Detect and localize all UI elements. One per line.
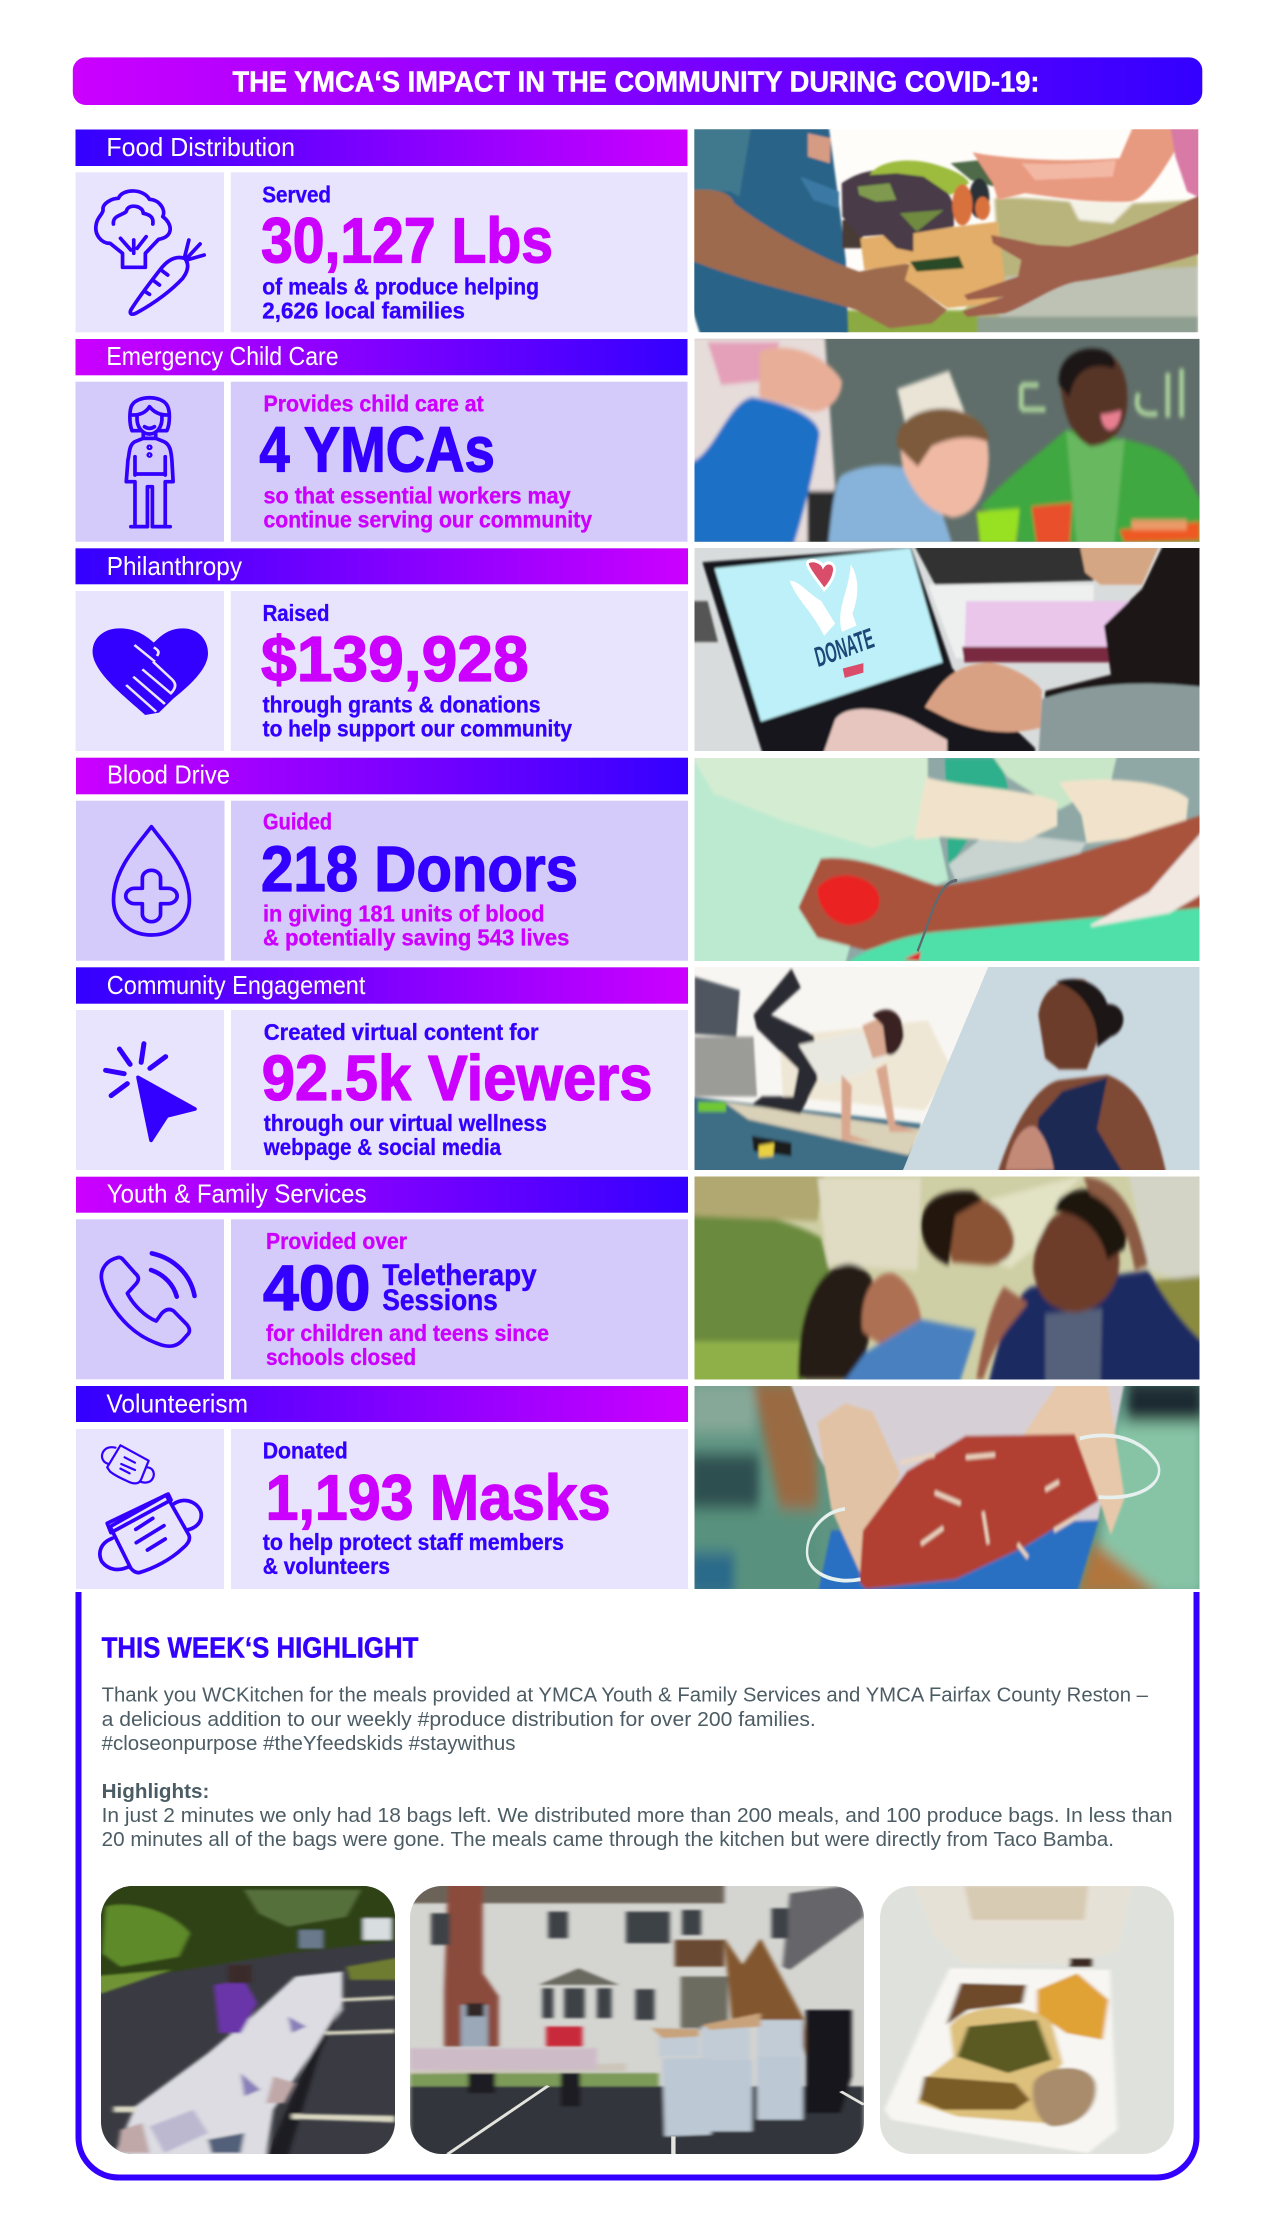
panel: Emergency Child Care xyxy=(76,336,1202,544)
section header: Food Distribution xyxy=(106,132,295,162)
stat text: 4 YMCAs: so that essential workers may xyxy=(264,482,571,508)
highlight body text xyxy=(102,1684,1172,1851)
panel: Blood Drive xyxy=(76,753,1202,965)
stat text: 4 YMCAs xyxy=(231,382,688,542)
stat text: $139,928 xyxy=(231,591,688,751)
panel: this week's highlight xyxy=(78,1592,1196,2178)
panel: Food Distribution xyxy=(76,127,1201,335)
photo: volunteer with bags along parking lot xyxy=(92,1883,404,2156)
section header xyxy=(76,1386,688,1422)
photo: family outdoors xyxy=(694,1176,1200,1380)
stat text: 92.5k Viewers: webpage & social media xyxy=(263,1134,501,1160)
stat text: 4 YMCAs: continue serving our community xyxy=(264,506,592,532)
stat text: 400 Teletherapy Sessions: Provided over xyxy=(266,1228,407,1254)
icon tile: child xyxy=(76,382,224,542)
stat text: 218 Donors: 218 Donors xyxy=(261,833,578,905)
stat text: 218 Donors: Guided xyxy=(263,808,332,834)
panel: Philanthropy xyxy=(76,546,1202,754)
stat text: $139,928: $139,928 xyxy=(261,623,529,695)
title banner xyxy=(73,57,1202,105)
section header: Blood Drive xyxy=(107,759,230,789)
stat text: 400 Teletherapy Sessions: Teletherapy xyxy=(382,1259,537,1292)
highlight body text: a delicious addition to our weekly #produce distribution for over 200 families. xyxy=(102,1708,816,1731)
section header: Volunteerism xyxy=(106,1389,248,1419)
photo: laptop showing donate screen: DONATE xyxy=(812,622,877,673)
stat text: 30,127 Lbs xyxy=(231,172,688,332)
icon tile: cursor click xyxy=(76,1010,224,1170)
rounded frame xyxy=(78,1592,1196,2178)
section header xyxy=(76,758,688,794)
stat text: 218 Donors: in giving 181 units of blood xyxy=(263,901,544,927)
highlight body text: In just 2 minutes we only had 18 bags left. We distributed more than 200 meals, and 100 produce bags. In less than xyxy=(102,1804,1172,1827)
photo: hands holding a red cloth mask xyxy=(694,1386,1200,1589)
stat text: 30,127 Lbs: 2,626 local families xyxy=(262,297,465,323)
photo: blood donation arm with red ball xyxy=(694,758,1200,961)
stat text: 30,127 Lbs: Served xyxy=(262,181,331,207)
icon tile: telephone xyxy=(76,1219,224,1379)
highlight body text: 20 minutes all of the bags were gone. The meals came through the kitchen but were directly from Taco Bamba. xyxy=(102,1828,1114,1851)
photo: tacos in takeout container xyxy=(880,1883,1174,2154)
stat text: 400 Teletherapy Sessions: schools closed xyxy=(266,1344,416,1370)
panel: Youth & Family Services xyxy=(76,1172,1202,1385)
stat text: 400 Teletherapy Sessions: Sessions xyxy=(382,1284,498,1317)
section header xyxy=(76,548,688,584)
icon tile: face masks xyxy=(76,1429,224,1589)
section header xyxy=(76,967,688,1004)
section header xyxy=(76,130,688,166)
panel: Volunteerism xyxy=(76,1382,1202,1595)
photo: hands passing a crate of produce xyxy=(694,129,1198,332)
highlight body text: Thank you WCKitchen for the meals provided at YMCA Youth & Family Services and YMCA Fairfax County Reston – xyxy=(102,1684,1149,1707)
stat text: $139,928: through grants & donations xyxy=(263,692,540,718)
section header: Youth & Family Services xyxy=(107,1178,367,1208)
stat text: 1,193 Masks: & volunteers xyxy=(263,1553,390,1579)
stat text: 1,193 Masks xyxy=(231,1429,688,1589)
icon tile: broccoli and carrot xyxy=(76,172,224,332)
section header xyxy=(76,339,688,375)
stat text: 218 Donors: & potentially saving 543 lives xyxy=(263,925,569,951)
photo: laptop showing donate screen xyxy=(694,548,1200,751)
stat text: 92.5k Viewers xyxy=(231,1010,688,1170)
stat text: 92.5k Viewers: 92.5k Viewers xyxy=(262,1042,652,1114)
stat text: 218 Donors xyxy=(231,801,688,961)
photo: home workout and meditation xyxy=(694,967,1200,1170)
stat text: 400 Teletherapy Sessions xyxy=(231,1219,688,1379)
stat text: 92.5k Viewers: through our virtual wellness xyxy=(264,1110,547,1136)
stat text: 1,193 Masks: 1,193 Masks xyxy=(266,1461,610,1533)
section header: Philanthropy xyxy=(107,551,242,581)
highlight heading: THIS WEEK‘S HIGHLIGHT xyxy=(102,1633,419,1665)
highlight body text: #closeonpurpose #theYfeedskids #staywithus xyxy=(102,1732,515,1755)
photo: children at a table xyxy=(694,338,1200,542)
stat text: 400 Teletherapy Sessions: for children and teens since xyxy=(266,1320,549,1346)
section header: Emergency Child Care xyxy=(106,341,339,371)
title banner: THE YMCA‘S IMPACT IN THE COMMUNITY DURING COVID-19: xyxy=(232,66,1040,98)
icon tile: blood drop with cross xyxy=(76,801,224,961)
section header: Community Engagement xyxy=(107,970,366,1000)
stat text: 1,193 Masks: Donated xyxy=(263,1438,348,1464)
stat text: $139,928: to help support our community xyxy=(263,716,572,742)
stat text: $139,928: Raised xyxy=(263,600,329,626)
photo: volunteers at table in front of white house xyxy=(410,1883,864,2156)
icon tile: heart with clasped hands xyxy=(76,591,224,751)
stat text: 4 YMCAs: Provides child care at xyxy=(264,391,484,417)
section header xyxy=(76,1177,688,1213)
panel: Community Engagement xyxy=(76,967,1200,1175)
stat text: 30,127 Lbs: of meals & produce helping xyxy=(262,273,539,299)
stat text: 400 Teletherapy Sessions: 400 xyxy=(263,1252,370,1324)
stat text: 1,193 Masks: to help protect staff members xyxy=(263,1529,564,1555)
highlight body text: Highlights: xyxy=(102,1780,209,1803)
stat text: 92.5k Viewers: Created virtual content for xyxy=(264,1019,539,1045)
stat text: 4 YMCAs: 4 YMCAs xyxy=(259,414,495,486)
stat text: 30,127 Lbs: 30,127 Lbs xyxy=(261,205,553,277)
